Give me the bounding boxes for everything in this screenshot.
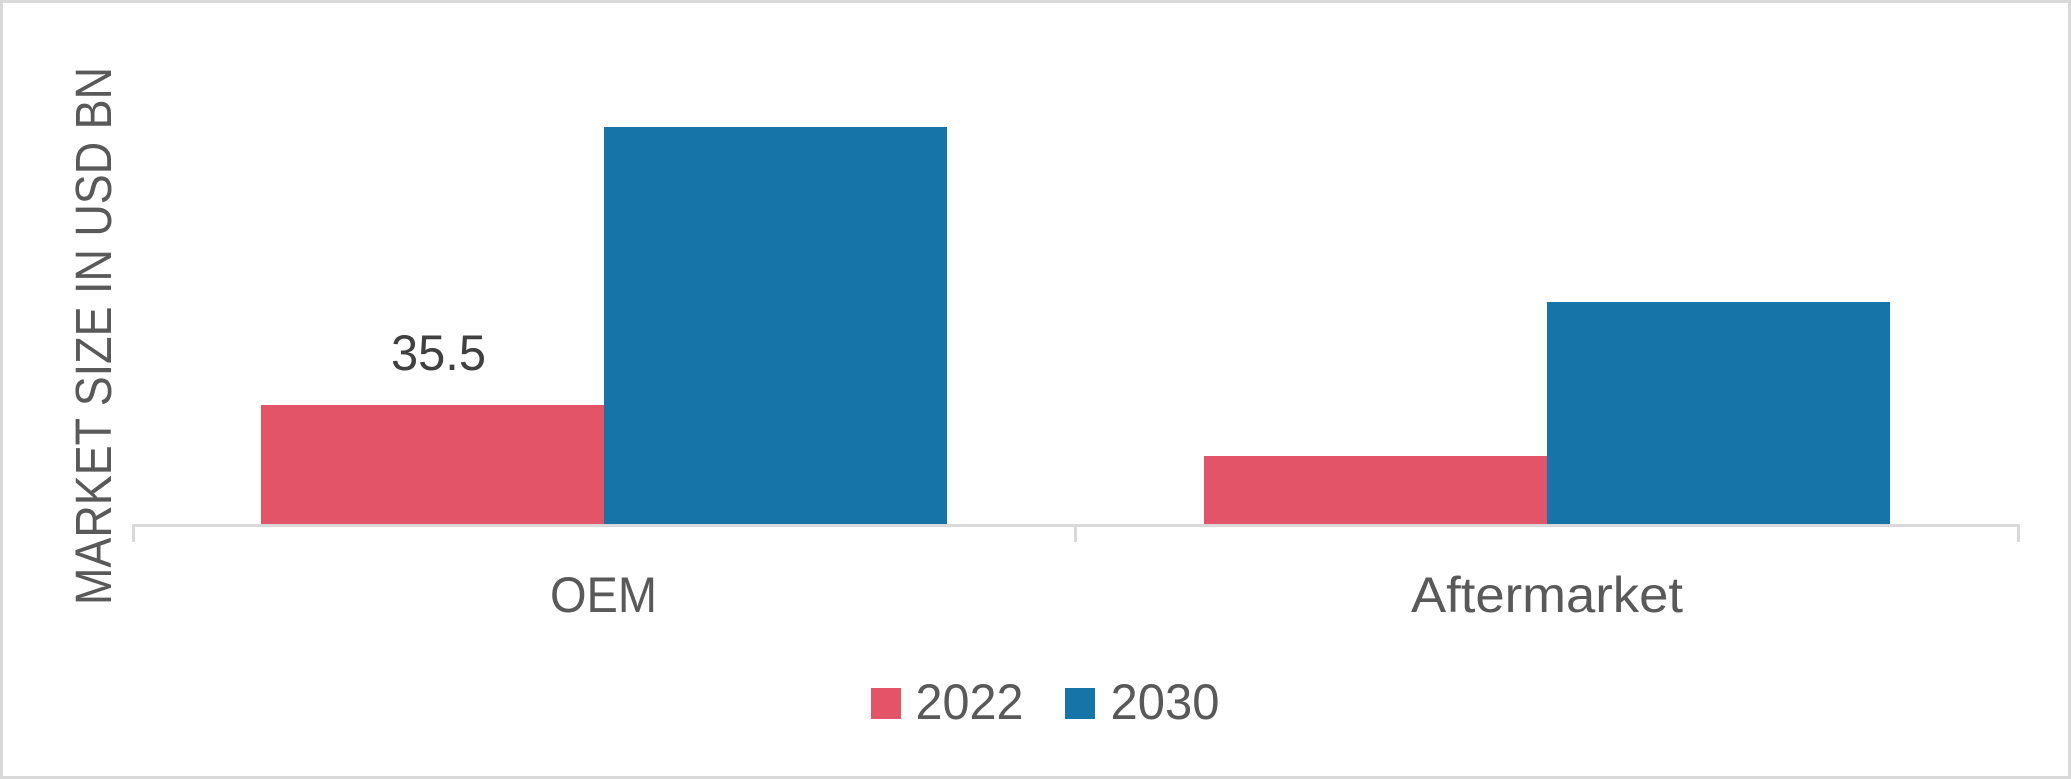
legend — [871, 674, 1220, 730]
bar: OEM 2030 — [604, 127, 947, 524]
legend label: 2030: 2030 — [1110, 674, 1220, 730]
data label: 35.5: 35.5 — [391, 325, 486, 381]
bars: Aftermarket — [1204, 302, 1890, 524]
legend swatch: 2030 — [1065, 688, 1095, 719]
bar: OEM 2022 — [261, 405, 604, 524]
category label: OEM: OEM — [550, 567, 657, 623]
x-axis line with ticks — [134, 526, 2018, 542]
legend swatch: 2022 — [871, 688, 901, 719]
category label: Aftermarket: Aftermarket — [1411, 567, 1683, 623]
bar: Aftermarket 2030 — [1547, 302, 1890, 524]
legend label: 2022: 2022 — [916, 674, 1024, 730]
bars: OEM — [261, 127, 947, 524]
y-axis title: MARKET SIZE IN USD BN — [65, 67, 122, 605]
bar: Aftermarket 2022 — [1204, 456, 1547, 524]
